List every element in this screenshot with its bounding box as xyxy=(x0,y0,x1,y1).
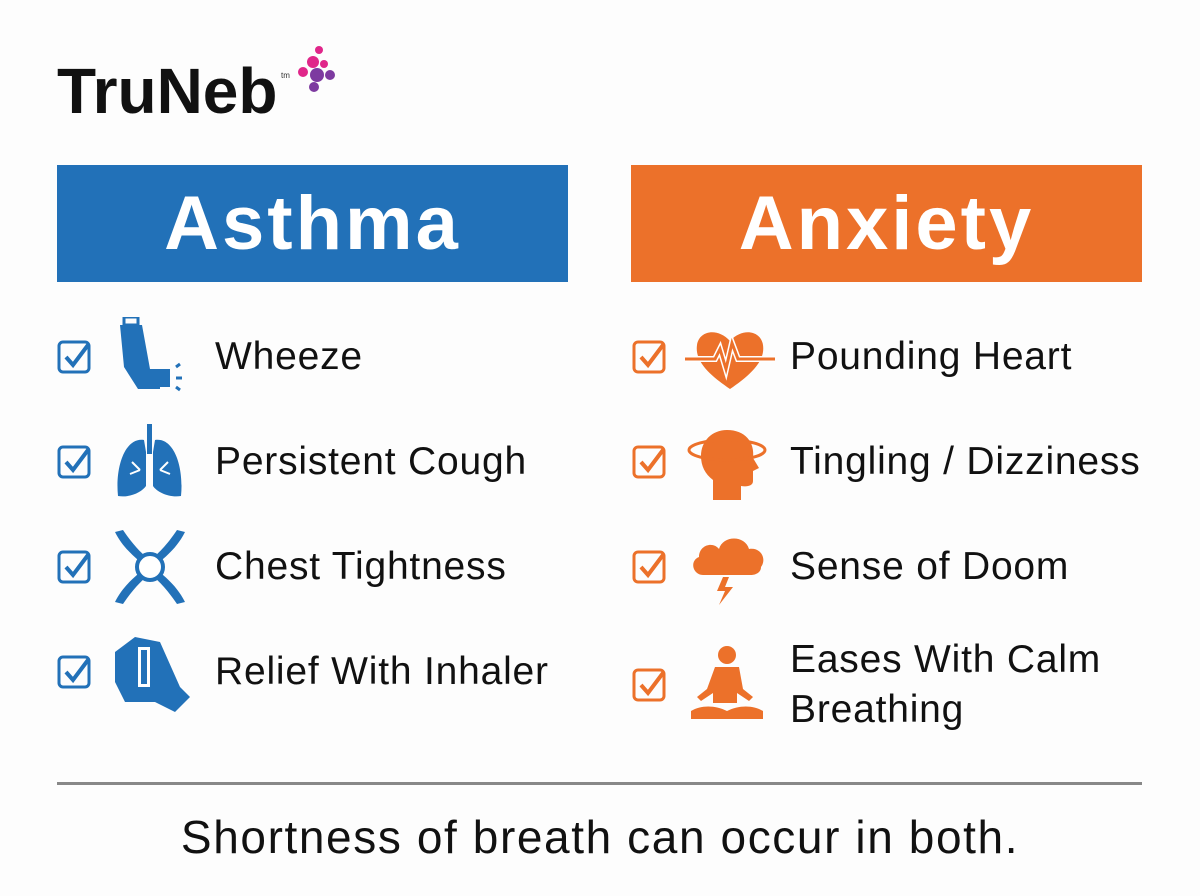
row: Pounding Heart xyxy=(632,332,1072,389)
logo: tm xyxy=(281,71,290,80)
footer text: Shortness of breath can occur in both. xyxy=(181,811,1019,863)
row: Wheeze: Wheeze xyxy=(215,335,363,378)
header: Asthma xyxy=(57,165,568,282)
row: Eases With Calm Breathing xyxy=(632,638,1101,731)
row: Persistent Cough xyxy=(58,424,527,496)
row: Pounding Heart: Pounding Heart xyxy=(790,335,1072,378)
header: Asthma: Asthma xyxy=(164,181,461,266)
row: Chest Tightness xyxy=(58,530,507,604)
row: Tingling / Dizziness: Tingling / Dizziness xyxy=(790,440,1141,483)
header: Anxiety xyxy=(631,165,1142,282)
row: Persistent Cough: Persistent Cough xyxy=(215,440,527,483)
row: Chest Tightness: Chest Tightness xyxy=(215,545,507,588)
row: Tingling / Dizziness xyxy=(632,430,1141,500)
row: Eases With Calm Breathing: Eases With Calm xyxy=(790,638,1101,681)
row: Relief With Inhaler xyxy=(58,637,549,712)
row: Relief With Inhaler: Relief With Inhaler xyxy=(215,650,549,693)
row: Sense of Doom xyxy=(632,538,1069,605)
row: Wheeze xyxy=(58,317,363,392)
row: Eases With Calm Breathing: Breathing xyxy=(790,688,964,731)
divider xyxy=(57,782,1142,785)
logo: TruNeb xyxy=(57,55,277,127)
header: Anxiety: Anxiety xyxy=(739,181,1034,266)
row: Sense of Doom: Sense of Doom xyxy=(790,545,1069,588)
